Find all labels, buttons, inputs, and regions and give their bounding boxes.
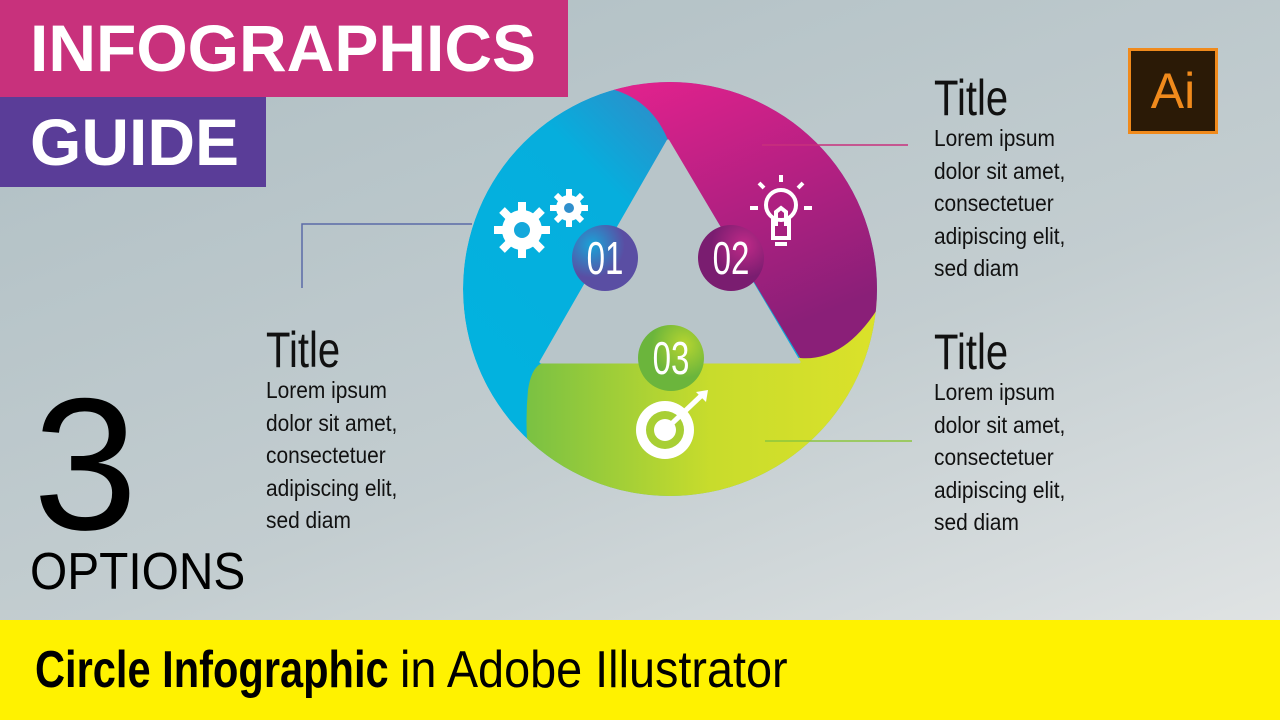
text block: bottom right: sed diam xyxy=(934,509,1019,535)
title: guide xyxy=(0,97,266,187)
text block: top right: Lorem ipsum xyxy=(934,125,1055,151)
footer bar: in Adobe Illustrator xyxy=(400,641,788,699)
badge 03: 03 xyxy=(653,334,689,384)
title: infographics xyxy=(0,0,568,97)
text block: top right: dolor sit amet, xyxy=(934,158,1065,184)
icon: target xyxy=(636,390,708,459)
badge 03 xyxy=(638,325,704,391)
badge 02 xyxy=(698,225,764,291)
text block: left: dolor sit amet, xyxy=(266,410,397,436)
text block: left: Lorem ipsum xyxy=(266,377,387,403)
text: options: OPTIONS xyxy=(30,543,245,601)
badge 01: 01 xyxy=(587,234,623,284)
text block: top right: consectetuer xyxy=(934,190,1054,216)
text block: left: adipiscing elit, xyxy=(266,474,397,500)
segment: blue xyxy=(463,82,877,496)
title: infographics: INFOGRAPHICS xyxy=(30,11,536,85)
text block: top right: Title xyxy=(934,70,1008,126)
text block: bottom right: adipiscing elit, xyxy=(934,476,1065,502)
text block: bottom right xyxy=(934,324,1065,535)
text block: bottom right: consectetuer xyxy=(934,444,1054,470)
icon: Ai logo xyxy=(1128,48,1218,134)
text block: bottom right: Lorem ipsum xyxy=(934,379,1055,405)
text block: top right xyxy=(934,70,1065,281)
text block: left xyxy=(266,322,397,533)
circle diagram xyxy=(301,82,912,496)
badge 01 xyxy=(572,225,638,291)
footer bar: Circle Infographic xyxy=(35,641,389,699)
segment: pink xyxy=(614,82,877,358)
text block: bottom right: dolor sit amet, xyxy=(934,412,1065,438)
badge 02: 02 xyxy=(713,234,749,284)
icon: Ai logo: Ai xyxy=(1151,63,1195,119)
segment: green xyxy=(526,300,877,496)
text block: left: Title xyxy=(266,322,340,378)
icon: gears xyxy=(494,189,588,258)
text block: left: consectetuer xyxy=(266,442,386,468)
title: guide: GUIDE xyxy=(30,105,239,179)
text block: top right: sed diam xyxy=(934,255,1019,281)
connector lines xyxy=(302,145,912,441)
text block: left: sed diam xyxy=(266,507,351,533)
big number 3: 3 xyxy=(33,359,138,569)
text block: bottom right: Title xyxy=(934,324,1008,380)
text block: top right: adipiscing elit, xyxy=(934,222,1065,248)
icon: lightbulb xyxy=(750,175,812,244)
inner triangle xyxy=(541,141,799,362)
footer bar xyxy=(0,620,1280,720)
